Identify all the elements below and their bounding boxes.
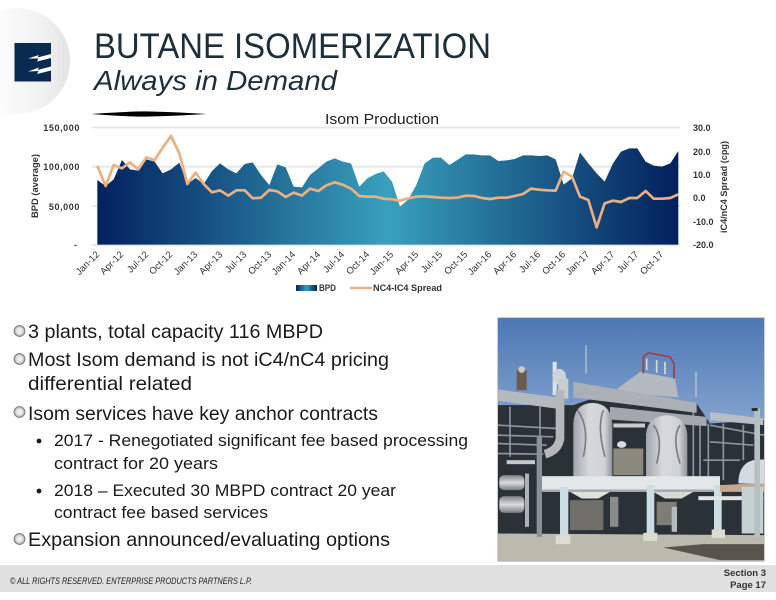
x axis labels: Jan-14 xyxy=(270,249,298,278)
x axis labels: Jul-13 xyxy=(223,249,249,275)
x axis labels: Apr-13 xyxy=(197,249,225,277)
left axis labels xyxy=(43,123,80,250)
x axis labels: Apr-16 xyxy=(491,249,519,277)
x axis labels: Oct-13 xyxy=(246,249,274,277)
bullet: demand: Most Isom demand is not iC4/nC4 pricing xyxy=(28,349,389,371)
sub-bullet: 2018 contract: 2018 – Executed 30 MBPD contract 20 year xyxy=(54,481,396,500)
left axis labels: 50,000 xyxy=(49,202,80,212)
x axis labels: Jan-12 xyxy=(74,249,102,278)
right axis title: iC4/nC4 Spread (cpg) xyxy=(719,141,730,233)
sub-bullet: 2018 contract xyxy=(37,481,396,522)
sub-bullet: 2017 contract: 2017 - Renegotiated significant fee based processing xyxy=(54,431,468,450)
chart: Isom Production xyxy=(30,112,730,293)
right axis labels: -10.0 xyxy=(693,217,714,227)
x axis labels: Oct-12 xyxy=(147,249,175,277)
chart title: Isom Production xyxy=(325,112,439,128)
bullet list xyxy=(14,321,468,551)
bullet: capacity: 3 plants, total capacity 116 MBPD xyxy=(28,321,323,343)
x axis labels: Jan-15 xyxy=(368,249,396,278)
photo: isomerization plant xyxy=(498,318,764,562)
bullet: demand xyxy=(14,349,389,395)
bullet: demand: differential related xyxy=(28,373,192,395)
right axis labels: 10.0 xyxy=(693,170,711,180)
x axis labels: Jan-17 xyxy=(564,249,592,278)
x axis labels: Apr-12 xyxy=(98,249,126,277)
x axis labels: Jul-17 xyxy=(615,249,641,275)
sub-bullet: 2017 contract: contract for 20 years xyxy=(54,454,218,473)
right axis labels: 20.0 xyxy=(693,147,711,157)
section and page number: Page 17 xyxy=(730,580,766,591)
line series: NC4-IC4 spread xyxy=(97,136,678,227)
decorative swoosh under title xyxy=(91,111,207,117)
x axis labels xyxy=(74,249,666,278)
bullet: expansion: Expansion announced/evaluating options xyxy=(28,529,390,551)
section and page number: Section 3 xyxy=(724,568,766,579)
right axis labels: 30.0 xyxy=(693,123,711,133)
left axis labels: 150,000 xyxy=(43,123,80,133)
footer bar xyxy=(0,565,776,592)
legend: NC4-IC4 Spread xyxy=(373,283,442,293)
title: BUTANE ISOMERIZATION xyxy=(94,27,491,66)
left axis labels: 100,000 xyxy=(43,162,80,172)
left axis title: BPD (average) xyxy=(30,154,41,218)
x axis labels: Apr-15 xyxy=(393,249,421,277)
sub-bullet: 2018 contract: contract fee based services xyxy=(54,503,268,522)
x axis labels: Apr-14 xyxy=(295,249,323,277)
right axis labels: -20.0 xyxy=(693,240,714,250)
x axis labels: Oct-14 xyxy=(344,249,372,277)
x axis labels: Jan-16 xyxy=(466,249,494,278)
right axis labels xyxy=(693,123,714,250)
x axis labels: Jul-15 xyxy=(419,249,445,275)
sub-bullet: 2017 contract xyxy=(37,431,468,473)
x axis labels: Jan-13 xyxy=(172,249,200,278)
left axis labels: - xyxy=(74,240,77,250)
x axis labels: Jul-12 xyxy=(125,249,151,275)
x axis labels: Apr-17 xyxy=(589,249,617,277)
legend: BPD xyxy=(319,283,336,293)
area series: BPD xyxy=(97,148,678,245)
x axis labels: Oct-15 xyxy=(442,249,470,277)
subtitle: Always in Demand xyxy=(92,65,338,96)
bullet: anchor contracts: Isom services have key anchor contracts xyxy=(28,403,378,425)
legend xyxy=(296,283,442,293)
x axis labels: Oct-16 xyxy=(540,249,568,277)
copyright text: © ALL RIGHTS RESERVED. ENTERPRISE PRODUCTS PARTNERS L.P. xyxy=(10,576,252,586)
right axis labels: 0.0 xyxy=(693,193,706,203)
x axis labels: Jul-16 xyxy=(517,249,543,275)
section and page number xyxy=(724,568,766,591)
x axis labels: Oct-17 xyxy=(638,249,666,277)
logo: company emblem xyxy=(0,8,70,114)
x axis labels: Jul-14 xyxy=(321,249,347,275)
